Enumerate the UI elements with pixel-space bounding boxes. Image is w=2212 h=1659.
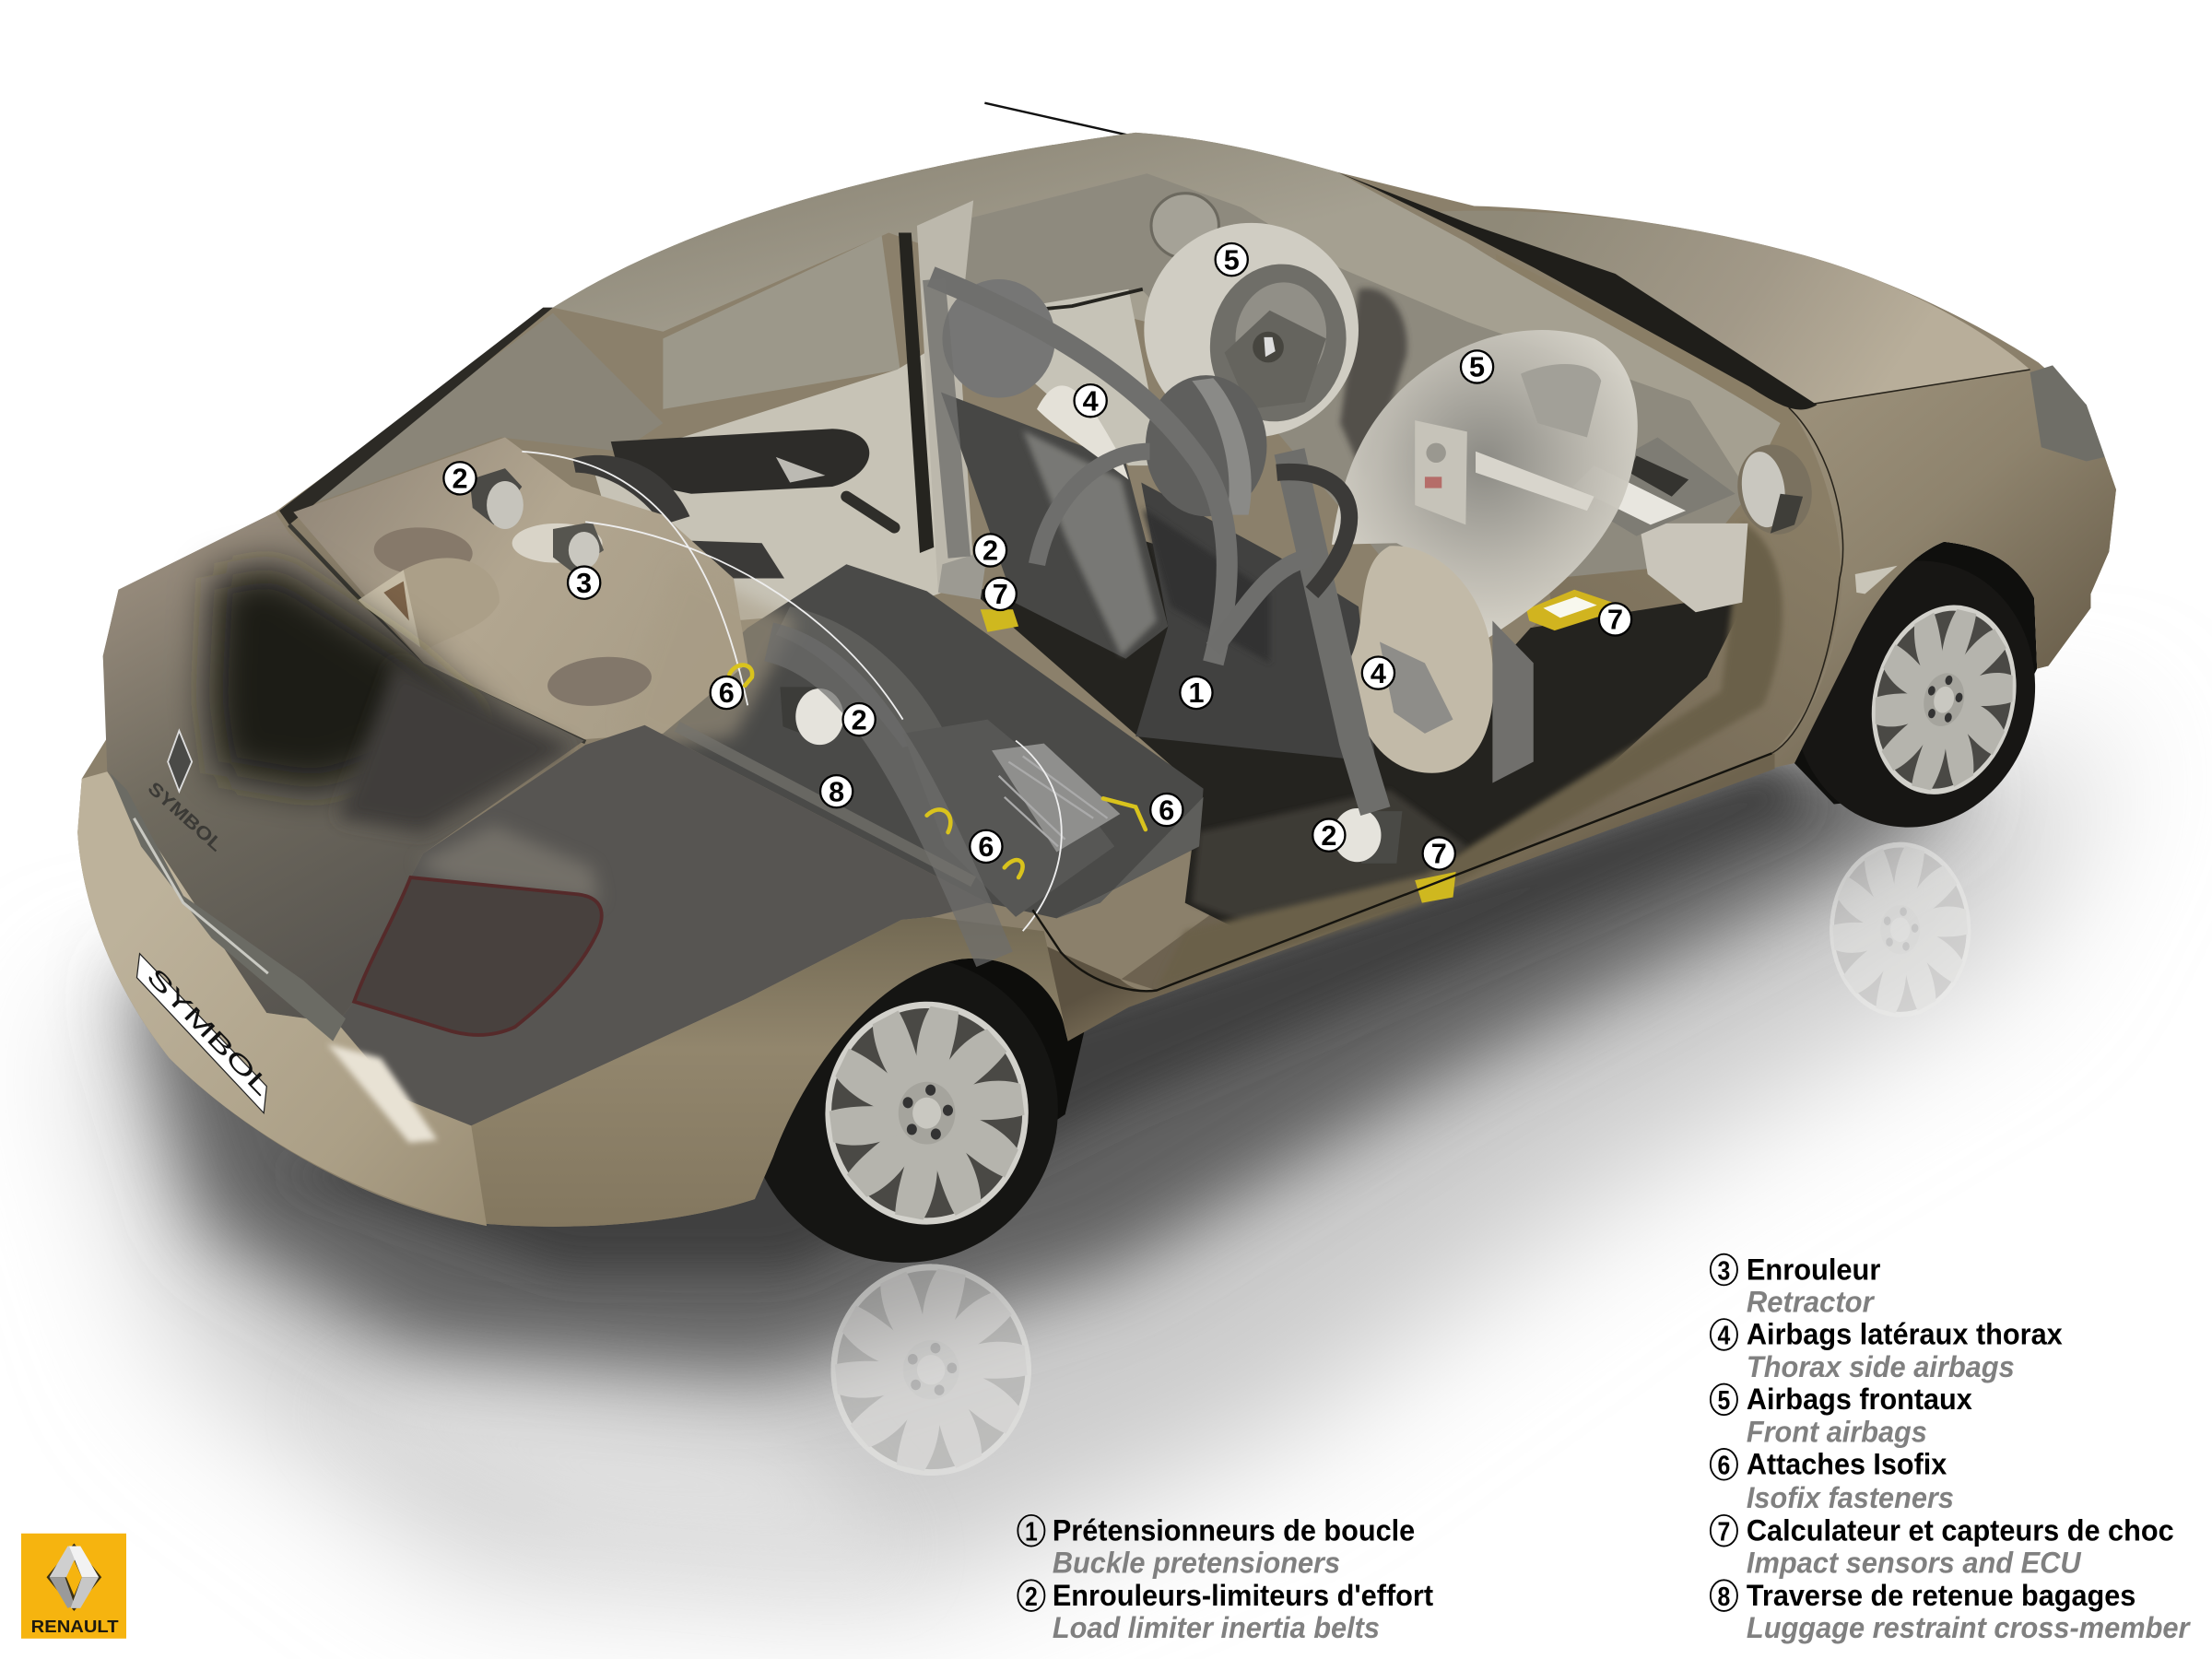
- callout numbers: 6: [1159, 794, 1174, 826]
- legend: right column: Front airbags: [1747, 1415, 1927, 1448]
- callout numbers: 1: [1188, 677, 1204, 709]
- steering wheel airbag: [1144, 223, 1359, 437]
- front footwell tan door lower: [1157, 522, 1783, 987]
- legend: left column: [1018, 1513, 1433, 1644]
- trunk badge: [168, 731, 192, 792]
- legend: right column: Airbags latéraux thorax: [1747, 1318, 2063, 1351]
- callout numbers: 2: [852, 704, 867, 735]
- callout numbers: 7: [1431, 839, 1447, 870]
- passenger front airbag: [1332, 330, 1638, 643]
- rear bumper: [77, 771, 487, 1226]
- rear tyre: [719, 926, 1087, 1291]
- car body silhouette: [77, 133, 2116, 1227]
- license plate: SYMBOL: [141, 962, 276, 1101]
- legend: right column: 6: [1718, 1451, 1730, 1480]
- legend: right column: [1711, 1253, 2191, 1644]
- tail light: [354, 877, 602, 1035]
- centre front seat: [1135, 375, 1375, 762]
- callout numbers: 6: [978, 831, 994, 863]
- roof glass and headliner: [553, 133, 1781, 487]
- legend: left column: Buckle pretensioners: [1053, 1547, 1340, 1580]
- B pillar: [899, 233, 934, 553]
- front door and A-pillar panel: [1122, 254, 1841, 990]
- side airbag inner seat view: [1380, 641, 1453, 734]
- callout numbers: 6: [719, 677, 735, 709]
- cross-member strip: [677, 726, 973, 882]
- hood and door seam lines: [1771, 370, 2030, 753]
- chrome highlight: [134, 818, 268, 973]
- driver seat base: [1492, 620, 1534, 782]
- parcel shelf belt reels: [470, 468, 604, 571]
- legend: left column: Load limiter inertia belts: [1053, 1611, 1380, 1644]
- Renault logo: [21, 1534, 126, 1639]
- legend: right column: Attaches Isofix: [1747, 1447, 1947, 1480]
- headlight: [2030, 365, 2105, 462]
- highlight on shoulder: [417, 825, 600, 903]
- antenna: [984, 103, 1135, 136]
- chrome trim: [110, 773, 346, 1041]
- legend: right column: Traverse de retenue bagages: [1747, 1579, 2136, 1612]
- callout numbers: [443, 243, 1631, 870]
- mirror: [1729, 438, 1820, 541]
- dashboard shadow: [1340, 288, 1407, 479]
- legend: left column: Enrouleurs-limiteurs d'effort: [1053, 1579, 1433, 1612]
- legend: right column: 3: [1718, 1256, 1730, 1286]
- legend: right column: Isofix fasteners: [1747, 1481, 1954, 1514]
- trunk model name: SYMBOL: [144, 779, 227, 855]
- callout numbers: 4: [1371, 658, 1386, 689]
- dark trunk interior: [209, 566, 494, 790]
- legend: right column: Airbags frontaux: [1747, 1382, 1972, 1416]
- trunk mid shade: [338, 663, 571, 832]
- rear quarter panel: [465, 917, 1068, 1227]
- window sill dark line: [957, 289, 1143, 317]
- windscreen view: [951, 173, 1749, 593]
- rear seat headrests: [572, 455, 784, 579]
- retractors: [780, 550, 1402, 864]
- dark floor: [973, 536, 1749, 946]
- legend: right column: 5: [1718, 1386, 1730, 1416]
- rear quarter dark panel: [337, 725, 987, 1125]
- side airbag far seat: [1037, 385, 1128, 479]
- front tyre: [1766, 535, 2063, 853]
- front fender: [1771, 370, 2116, 768]
- callout numbers: 2: [982, 535, 998, 567]
- rear window dark frame: [279, 308, 553, 524]
- side repeater: [1855, 566, 1898, 594]
- Isofix hooks: [729, 665, 1146, 877]
- hood: [1439, 211, 2030, 407]
- interior mirror: [1151, 194, 1218, 258]
- dash vent and strip: [1566, 437, 1735, 536]
- dashboard radio: [1415, 364, 1601, 524]
- wheel reflection: front: [1817, 826, 1984, 1033]
- floor shadow and reflection: [77, 734, 2116, 1594]
- callout numbers: 7: [993, 579, 1008, 610]
- rear wheel arch: [773, 956, 1087, 1213]
- legend: right column: Retractor: [1747, 1285, 1875, 1318]
- license plate: [136, 954, 276, 1113]
- callout numbers: 5: [1469, 352, 1485, 383]
- rear wheel rim: [809, 984, 1044, 1242]
- legend: right column: 8: [1718, 1583, 1730, 1612]
- bumper highlight: [327, 1044, 437, 1143]
- callout numbers: 8: [829, 776, 844, 807]
- front wheel rim: [1853, 590, 2036, 810]
- legend: right column: Enrouleur: [1747, 1253, 1881, 1286]
- centre floor carpet: [1192, 790, 1467, 931]
- parcel shelf: [289, 437, 797, 747]
- Renault logo: RENAULT: [31, 1617, 119, 1636]
- callout numbers: 5: [1224, 244, 1240, 276]
- far-side rear window: [663, 236, 900, 409]
- kick panel: [1640, 524, 1747, 612]
- legend: left column: 2: [1025, 1583, 1038, 1612]
- callout numbers: 3: [576, 568, 592, 599]
- legend: right column: Calculateur et capteurs de choc: [1747, 1513, 2174, 1547]
- rear bench seat: [644, 564, 1204, 918]
- far-side rear door: [593, 353, 942, 620]
- door armrest and handle: [611, 429, 894, 527]
- callout numbers: 2: [452, 464, 467, 495]
- trunk lid: [103, 512, 584, 1023]
- callout numbers: 4: [1083, 385, 1099, 417]
- callout numbers: 7: [1607, 605, 1623, 636]
- windscreen wiper gap: [1337, 172, 1817, 409]
- legend: right column: Thorax side airbags: [1747, 1350, 2015, 1383]
- black door seam: [1032, 753, 1771, 991]
- far front door: [959, 289, 1213, 465]
- legend: right column: 4: [1718, 1322, 1731, 1351]
- wheel reflection: rear: [812, 1244, 1050, 1495]
- legend: right column: 7: [1718, 1517, 1730, 1547]
- legend: left column: 1: [1025, 1517, 1038, 1547]
- right side airbag: [1351, 546, 1494, 773]
- legend: right column: Luggage restraint cross-member: [1747, 1611, 2191, 1644]
- rear windscreen: [282, 313, 663, 515]
- door sill: [1044, 753, 1775, 1041]
- yellow ECU box: [1526, 590, 1612, 630]
- legend: left column: Prétensionneurs de boucle: [1053, 1513, 1415, 1547]
- callout numbers: 2: [1321, 820, 1336, 852]
- front wheel arch: [1794, 542, 2037, 804]
- yellow sensors: [981, 609, 1456, 903]
- legend: right column: Impact sensors and ECU: [1747, 1547, 2081, 1580]
- seat belts: [522, 276, 1375, 959]
- far front seat: [941, 279, 1168, 659]
